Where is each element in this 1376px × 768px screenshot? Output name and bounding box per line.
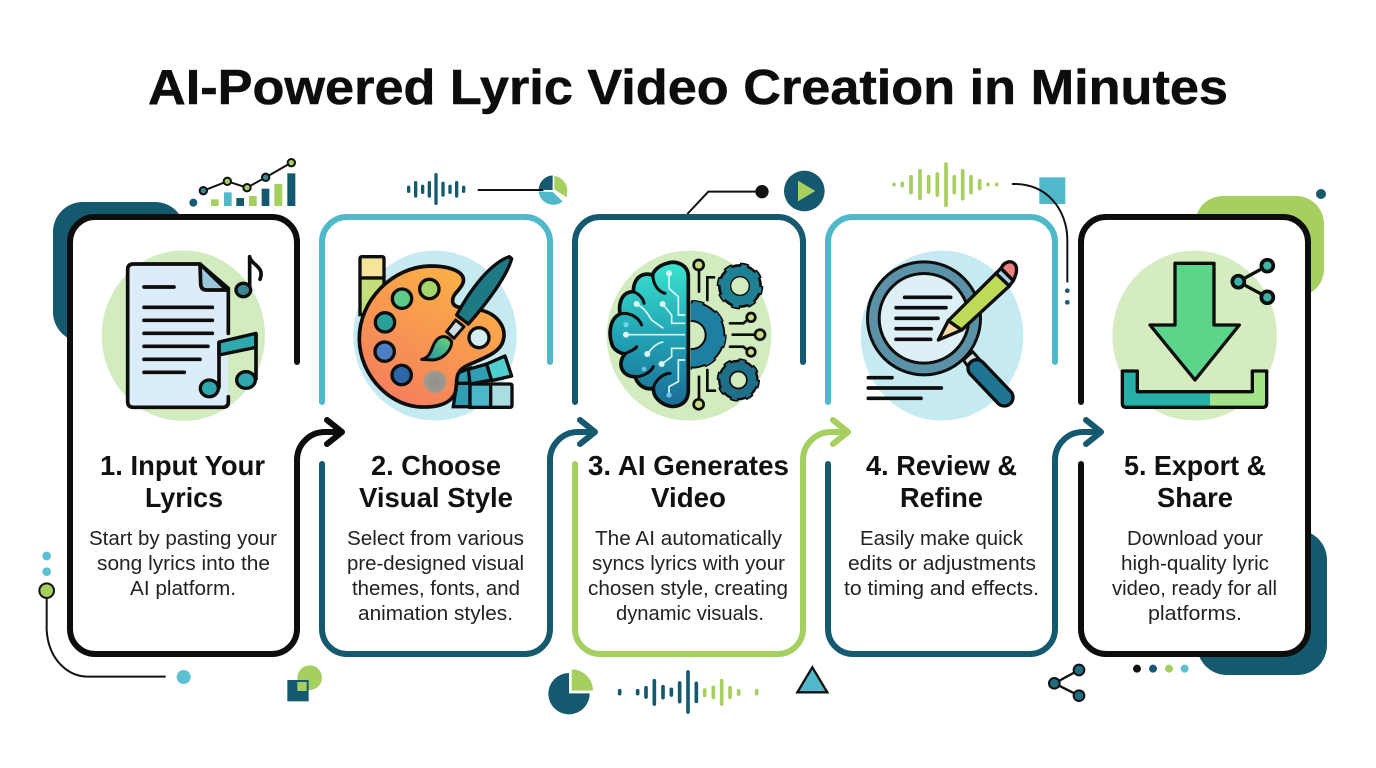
heading 1: 1. Input Your (100, 450, 265, 481)
heading 4: Refine (900, 482, 983, 513)
heading 3: 3. AI Generates (588, 450, 789, 481)
half gear (690, 300, 727, 370)
icon: lyric sheet with music notes (102, 250, 265, 421)
body text 3: chosen style, creating (588, 578, 788, 600)
gear top (721, 267, 759, 305)
panel frame 1 (70, 217, 342, 654)
heading 1: Lyrics (145, 482, 223, 513)
decoration: green blob behind step 5 (1195, 196, 1324, 297)
body text 5 (1112, 528, 1277, 625)
body text 3: syncs lyrics with your (592, 553, 785, 575)
icon: paint palette and brush (353, 251, 517, 421)
body text 2: themes, fonts, and (352, 578, 520, 600)
heading 5: 5. Export & (1124, 450, 1266, 481)
decoration: waveform and pie chart above step 2 (409, 175, 567, 205)
body text 3: dynamic visuals. (616, 603, 764, 625)
decoration: dots and curved connector bottom left (39, 552, 322, 701)
gear bottom (720, 362, 756, 398)
heading 1 (100, 450, 265, 513)
body text 4 (844, 528, 1039, 600)
panel frame 4 (828, 217, 1101, 654)
heading 5: Share (1157, 482, 1233, 513)
body text 3 (588, 528, 788, 625)
heading 5 (1124, 450, 1266, 513)
body text 2: Select from various (347, 528, 524, 550)
body text 5: high-quality lyric (1121, 553, 1269, 575)
body text 1: AI platform. (130, 578, 236, 600)
panel frame 2 (322, 217, 595, 654)
title: AI-Powered Lyric Video Creation in Minutes (148, 61, 1228, 115)
decoration: pie, waveform and triangle below step 3 (548, 667, 827, 714)
body text 4: to timing and effects. (844, 578, 1039, 600)
decoration: dark teal blob behind step 5 (1197, 530, 1327, 675)
body text 5: platforms. (1148, 603, 1242, 625)
decoration: dark teal blob behind step 1 (53, 202, 185, 342)
icon: magnifying glass and pencil (861, 251, 1023, 421)
decoration: connector and play button (687, 171, 825, 214)
body text 1: song lyrics into the (97, 553, 270, 575)
body text 4: edits or adjustments (848, 553, 1036, 575)
body text 2: pre-designed visual (347, 553, 524, 575)
icon: AI brain with gears (607, 251, 771, 421)
decoration: green waveform and square with curve (894, 164, 1070, 305)
heading 2: Visual Style (359, 482, 513, 513)
panel: step 5 export and share (1081, 217, 1308, 654)
heading 4: 4. Review & (866, 450, 1017, 481)
body text 1 (89, 528, 277, 600)
body text 5: Download your (1127, 528, 1263, 550)
decoration: share icon and dots bottom right (1049, 665, 1189, 701)
body text 2: animation styles. (358, 603, 513, 625)
heading 4 (866, 450, 1017, 513)
heading 2: 2. Choose (371, 450, 501, 481)
body text 4: Easily make quick (860, 528, 1024, 550)
panel frame 3 (575, 217, 848, 654)
panel: step 2 choose visual style (322, 217, 595, 654)
panel: step 3 AI generates video (575, 217, 848, 654)
body text 2 (347, 528, 524, 625)
heading 3: Video (651, 482, 726, 513)
body text 3: The AI automatically (595, 528, 782, 550)
infographic (38, 68, 1327, 714)
icon: download arrow with share (1112, 251, 1277, 421)
body text 1: Start by pasting your (89, 528, 277, 550)
panel: step 1 input your lyrics (70, 217, 342, 654)
panel: step 4 review and refine (828, 217, 1101, 654)
decoration: dot top right (1316, 189, 1326, 199)
decoration: mini line and bar chart (189, 159, 295, 207)
heading 2 (359, 450, 513, 513)
body text 5: video, ready for all (1112, 578, 1277, 600)
heading 3 (588, 450, 789, 513)
panel frame 5 (1081, 217, 1308, 654)
